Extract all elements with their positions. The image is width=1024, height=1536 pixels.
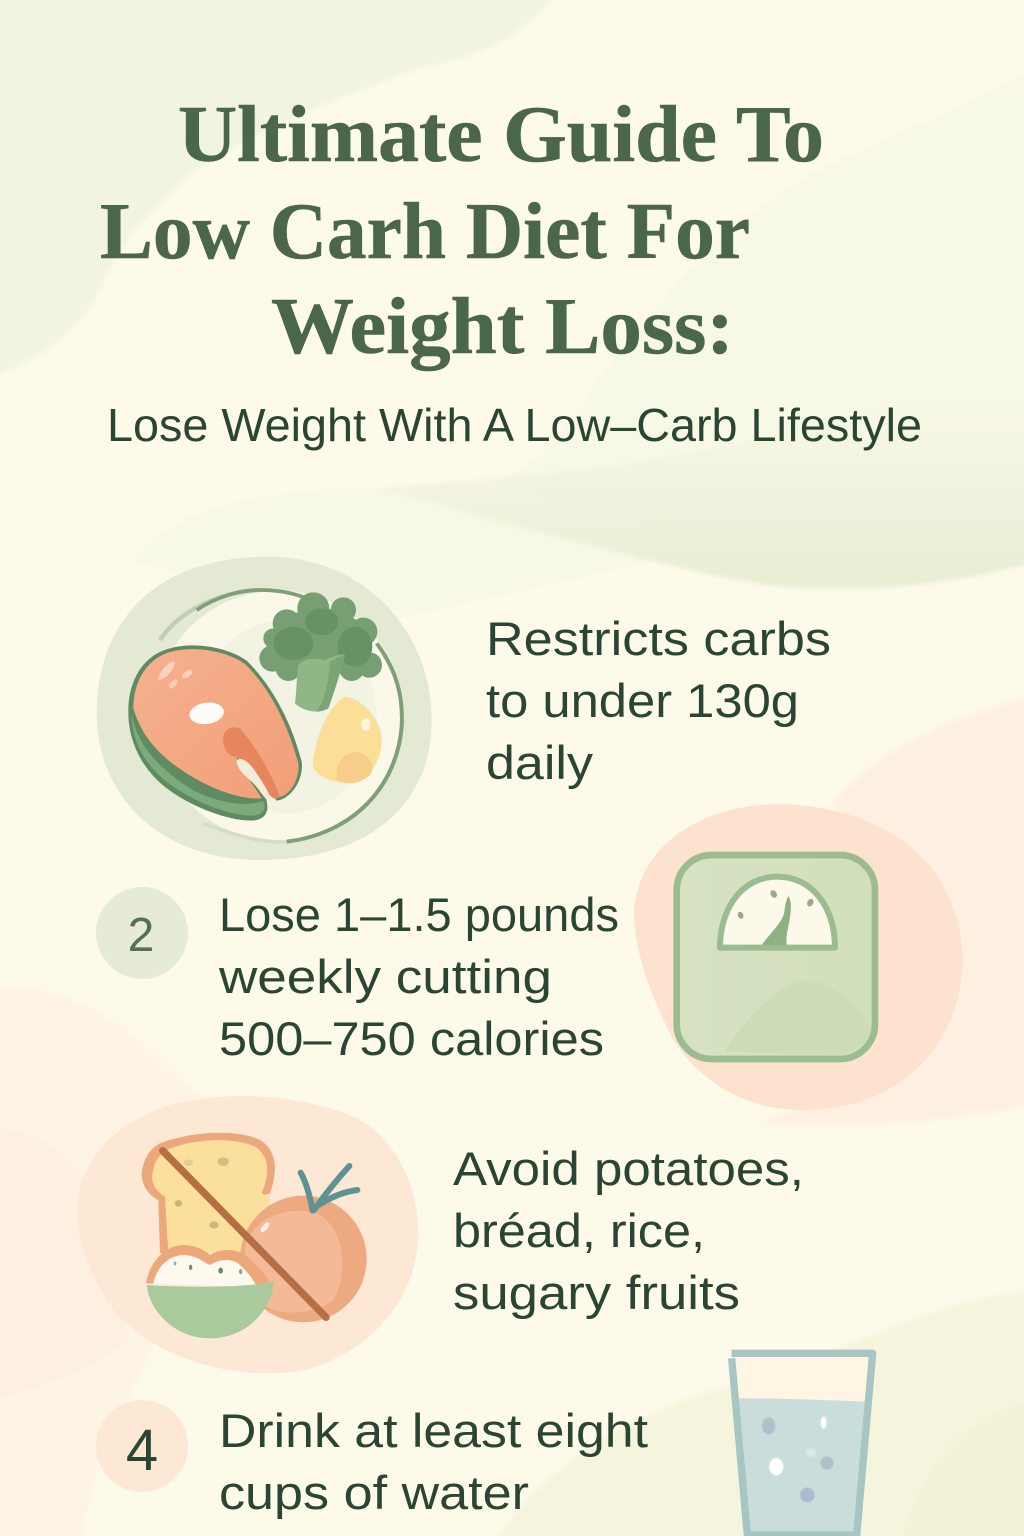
peach blob <box>77 1096 418 1373</box>
icon: crossed-out bread, rice and fruit <box>77 1096 418 1373</box>
potato <box>313 697 382 783</box>
bubbles <box>762 1417 834 1502</box>
plate <box>153 590 403 842</box>
point 1 text <box>486 612 831 789</box>
rice bowl <box>146 1245 274 1338</box>
point 1 text: Restricts carbs <box>486 612 831 665</box>
plate backing circle <box>97 557 432 860</box>
point 2 text: weekly cutting <box>218 950 552 1003</box>
point 1 text: daily <box>486 736 594 789</box>
fruit <box>240 1166 367 1322</box>
point 3 text: bréad, rice, <box>453 1204 705 1257</box>
number badge 2: 2 <box>128 909 154 962</box>
point 3 text: Avoid potatoes, <box>453 1142 804 1195</box>
point 3 text <box>453 1142 804 1319</box>
water <box>737 1398 867 1533</box>
icon: plate with salmon, broccoli and potato <box>97 557 432 860</box>
title <box>100 91 824 371</box>
title: Ultimate Guide To <box>178 91 824 179</box>
peach blob <box>634 804 963 1110</box>
number badge 2 <box>96 887 188 979</box>
point 2 text: Lose 1–1.5 pounds <box>219 888 619 941</box>
icon: glass of water <box>729 1353 875 1536</box>
point 3 text: sugary fruits <box>453 1266 740 1319</box>
glass outline <box>732 1353 873 1535</box>
title: Weight Loss: <box>271 283 734 371</box>
scale body <box>677 855 875 1059</box>
title: Low Carh Diet For <box>100 188 750 276</box>
point 2 text: 500–750 calories <box>219 1012 604 1065</box>
point 4 text: Drink at least eight <box>219 1404 648 1457</box>
bread slice <box>142 1133 275 1253</box>
subtitle: Lose Weight With A Low–Carb Lifestyle <box>107 399 922 451</box>
glass body <box>729 1353 875 1536</box>
point 1 text: to under 130g <box>486 674 799 727</box>
broccoli <box>259 592 382 712</box>
point 4 text: cups of water <box>219 1466 529 1519</box>
scale shading <box>725 980 871 1055</box>
point 2 text <box>218 888 619 1065</box>
prohibition slash <box>163 1151 326 1317</box>
icon: bathroom scale <box>634 804 963 1110</box>
number badge 4: 4 <box>126 1418 158 1483</box>
salmon steak <box>128 645 302 821</box>
number badge 4 <box>96 1400 188 1492</box>
point 4 text <box>219 1404 648 1519</box>
scale dial <box>720 877 835 948</box>
